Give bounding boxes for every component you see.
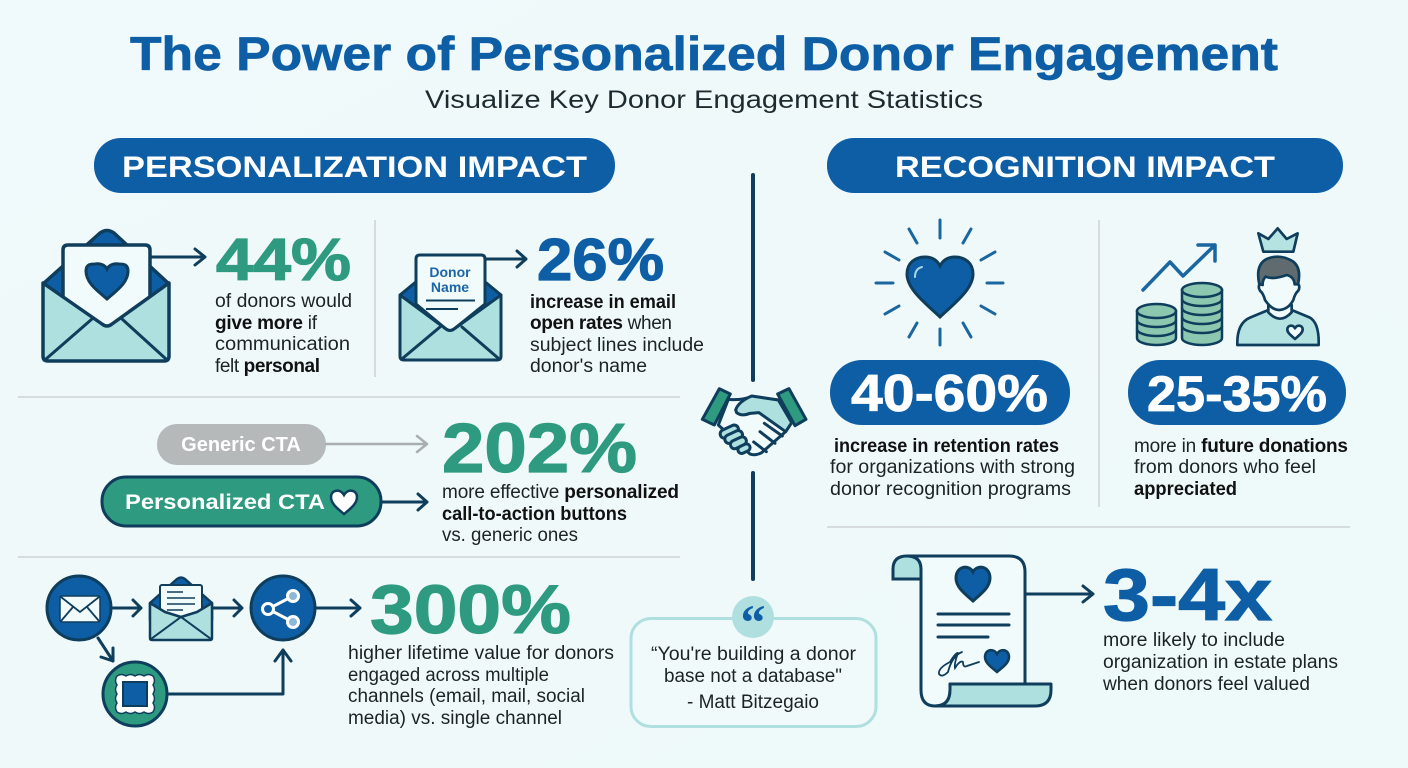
text: 26% description: donor's name xyxy=(530,356,647,377)
text: 202% description: vs. generic ones xyxy=(442,525,578,546)
text: 3-4x description xyxy=(1102,630,1338,695)
icon: email circle xyxy=(47,576,111,640)
icon: growth arrow xyxy=(1143,245,1215,290)
stat: 26%: 26% xyxy=(537,227,664,293)
text: 25-35% description: from donors who feel xyxy=(1134,457,1316,478)
icon: estate plan scroll xyxy=(893,556,1051,706)
text: 25-35% description: appreciated xyxy=(1134,479,1237,500)
text: 300% description: higher lifetime value for donors xyxy=(348,643,614,664)
quote box: - Matt Bitzegaio xyxy=(687,692,819,713)
text: 44% description xyxy=(215,291,352,377)
icon: envelope with donor name: Donor xyxy=(429,264,471,280)
text: 3-4x description: when donors feel valued xyxy=(1102,674,1310,695)
text: 44% description: of donors would xyxy=(215,291,352,312)
icon: coin stacks xyxy=(1137,283,1222,345)
arrow xyxy=(98,638,113,661)
center divider bottom xyxy=(751,473,755,579)
title: The Power of Personalized Donor Engagement xyxy=(130,27,1278,80)
icon: envelope with heart xyxy=(43,230,169,361)
icon: mail envelope xyxy=(150,578,212,640)
stat pill: 40-60% xyxy=(830,360,1070,425)
quote box: “You're building a donor xyxy=(651,644,857,665)
stat: 202%: 202% xyxy=(442,409,637,487)
icon: handshake xyxy=(702,389,806,455)
text: 26% description xyxy=(530,292,704,377)
text: 25-35% description xyxy=(1134,436,1348,500)
quote box xyxy=(631,594,876,726)
heading: recognition impact xyxy=(827,138,1343,193)
stat pill: 40-60%: 40-60% xyxy=(851,365,1048,423)
icon: envelope with donor name: Name xyxy=(431,279,469,295)
text: 202% description xyxy=(442,482,679,546)
text: 3-4x description: organization in estate plans xyxy=(1103,652,1338,673)
text: 40-60% description xyxy=(830,436,1075,500)
icon: coins, growth arrow and donor xyxy=(1137,228,1319,345)
button: personalized CTA: Personalized CTA xyxy=(125,491,325,514)
icon: stamp circle xyxy=(103,662,167,726)
text: 40-60% description: for organizations with strong xyxy=(830,457,1075,478)
stat pill: 25-35% xyxy=(1128,360,1346,425)
text: 44% description: communication xyxy=(215,334,350,355)
icon: quotation mark xyxy=(732,594,774,650)
button: personalized CTA xyxy=(102,477,381,526)
button: generic CTA: Generic CTA xyxy=(181,434,301,456)
text: 300% description xyxy=(348,643,614,729)
icon: quotation mark: “ xyxy=(740,594,766,650)
button: generic CTA xyxy=(157,424,326,465)
arrow xyxy=(485,251,526,267)
subtitle: Visualize Key Donor Engagement Statistics xyxy=(425,86,983,114)
arrow xyxy=(213,600,242,616)
arrow xyxy=(1025,586,1093,602)
heading: personalization impact xyxy=(94,138,615,193)
icon: donor with crown xyxy=(1237,228,1319,345)
text: 202% description: more effective personalized xyxy=(442,482,679,503)
stat: 300%: 300% xyxy=(370,571,571,648)
text: 40-60% description: increase in retention rates xyxy=(834,436,1059,457)
center divider top xyxy=(751,175,755,380)
stat: 3-4x: 3-4x xyxy=(1103,555,1272,636)
icon: channel flow xyxy=(47,576,360,726)
arrow xyxy=(381,494,427,510)
stat pill: 25-35%: 25-35% xyxy=(1147,366,1327,422)
icon: envelope with donor name xyxy=(400,255,501,360)
stat: 44%: 44% xyxy=(216,227,351,293)
quote box: base not a database" xyxy=(664,666,842,687)
text: 44% description: give more if xyxy=(215,313,318,334)
text: 3-4x description: more likely to include xyxy=(1103,630,1285,651)
text: 202% description: call-to-action buttons xyxy=(442,504,627,525)
text: 40-60% description: donor recognition programs xyxy=(830,479,1071,500)
text: 300% description: engaged across multiple xyxy=(348,665,549,686)
arrow xyxy=(326,436,427,452)
icon: glowing heart xyxy=(876,220,1003,345)
arrow xyxy=(316,600,360,616)
text: 25-35% description: more in future donations xyxy=(1134,436,1348,457)
arrow xyxy=(150,249,205,265)
text: 300% description: channels (email, mail, social xyxy=(348,686,585,707)
text: 300% description: media) vs. single channel xyxy=(348,708,562,729)
heading: recognition impact: RECOGNITION IMPACT xyxy=(895,151,1275,184)
arrow xyxy=(168,650,291,694)
text: 26% description: increase in email xyxy=(530,292,676,313)
icon: share circle xyxy=(251,576,315,640)
text: 26% description: subject lines include xyxy=(530,335,704,356)
text: 26% description: open rates when xyxy=(530,313,672,334)
arrow xyxy=(113,600,141,616)
heading: personalization impact: PERSONALIZATION IMPACT xyxy=(122,151,587,184)
text: 44% description: felt personal xyxy=(215,356,320,377)
